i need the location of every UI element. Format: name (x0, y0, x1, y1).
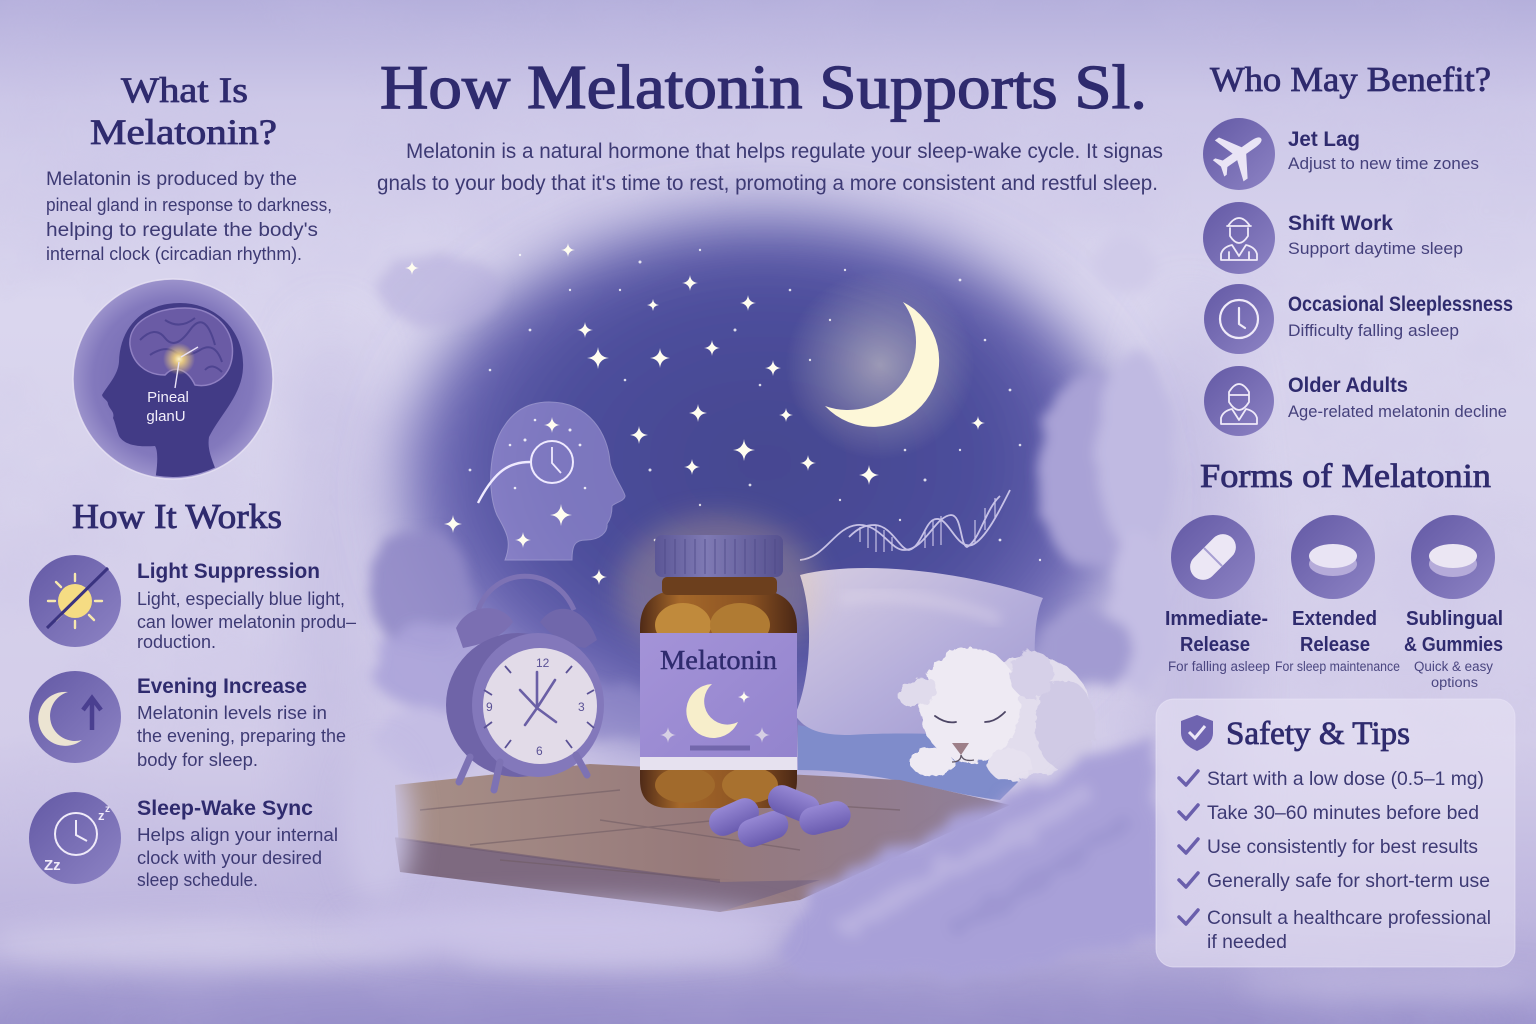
clock face (483, 648, 597, 764)
label: sublingual and gummies: & Gummies (1404, 634, 1503, 656)
pineal gland label: Pineal (147, 389, 189, 406)
text: sleep-wake sync: clock with your desired (137, 847, 322, 868)
text: shift work (1288, 211, 1463, 258)
lavender blanket (775, 735, 1170, 975)
icon: older adult (1204, 366, 1274, 436)
label: extended release: Extended (1292, 608, 1377, 630)
bottom mist (340, 904, 780, 956)
text: shift work: Support daytime sleep (1288, 239, 1463, 258)
text: evening increase: body for sleep. (137, 749, 258, 770)
panel background (1156, 699, 1515, 967)
heading: how it works: How It Works (72, 497, 282, 536)
text: evening increase (137, 674, 346, 770)
tip list: Generally safe for short-term use (1207, 870, 1490, 892)
text: sleep-wake sync: Sleep-Wake Sync (137, 796, 313, 820)
label: extended release: Release (1300, 634, 1370, 656)
text: light suppression: roduction. (137, 631, 216, 652)
clock ticks: 9 (486, 700, 493, 714)
text: jet lag (1288, 127, 1479, 173)
blue sheet (798, 719, 1030, 800)
item: jet lag (1203, 118, 1479, 190)
tip list: Use consistently for best results (1207, 836, 1478, 858)
item: occasional sleeplessness (1204, 284, 1513, 354)
text: older adults: Age-related melatonin decline (1288, 402, 1507, 421)
clock bells (456, 608, 513, 648)
icon: head with pineal gland (73, 279, 273, 480)
form: sublingual and gummies (1404, 515, 1503, 690)
item: sleep-wake sync (29, 792, 338, 890)
text: light suppression (137, 559, 357, 652)
pillow (795, 568, 1043, 735)
label: sublingual and gummies: Sublingual (1406, 608, 1503, 630)
panel: what is melatonin (46, 70, 332, 480)
small stars (469, 249, 1041, 561)
clock body (446, 633, 590, 777)
label: sublingual and gummies (1404, 608, 1503, 690)
text: jet lag: Adjust to new time zones (1288, 154, 1479, 173)
icon: shield (1181, 715, 1213, 751)
definition text: pineal gland in response to darkness, (46, 194, 332, 215)
item: light suppression (29, 555, 357, 652)
text: sleep-wake sync (137, 796, 338, 890)
label: immediate release: Release (1180, 634, 1250, 656)
melatonin bottle (618, 515, 818, 808)
pineal gland label: glanU (146, 408, 186, 425)
text: older adults: Older Adults (1288, 373, 1408, 397)
clock ticks: 12 (536, 656, 550, 670)
heading: who may benefit: Who May Benefit? (1210, 60, 1491, 99)
panel: who may benefit (1203, 60, 1513, 436)
text: sleep-wake sync: sleep schedule. (137, 869, 258, 890)
large stars (405, 243, 985, 585)
icon: clock and z's: z (105, 804, 110, 815)
text: evening increase: the evening, preparing the (137, 725, 346, 746)
DNA strand (800, 490, 1010, 560)
text: shift work: Shift Work (1288, 211, 1393, 235)
tip list: Start with a low dose (0.5–1 mg) (1207, 768, 1484, 790)
panel: how it works (29, 497, 357, 890)
subtitle: Melatonin is a natural hormone that helps regulate your sleep-wake cycle. It signas (406, 140, 1163, 163)
label crescent (686, 684, 738, 738)
alarm clock (446, 576, 604, 790)
item: older adults (1204, 366, 1507, 436)
item: evening increase (29, 671, 346, 770)
icon: clock (1204, 284, 1274, 354)
clock hands (520, 672, 556, 725)
text: occasional sleeplessness (1288, 292, 1513, 340)
pineal gland label (146, 389, 189, 425)
label: sublingual and gummies: Quick & easy (1414, 659, 1493, 674)
heading: safety and tips: Safety & Tips (1226, 716, 1410, 752)
tip list (1179, 768, 1491, 953)
icon: clock and z's (29, 792, 121, 884)
text: evening increase: Melatonin levels rise in (137, 702, 327, 723)
icon: lozenge (1411, 515, 1495, 599)
subtitle: gnals to your body that it's time to rest, promoting a more consistent and restful sleep. (377, 172, 1158, 195)
heading: what is melatonin (90, 70, 277, 152)
icon: worker (1203, 202, 1275, 274)
table left fade (346, 750, 410, 900)
right clouds (1037, 237, 1173, 690)
clock ticks: 3 (578, 700, 585, 714)
bottle cap (655, 535, 783, 577)
wooden table (395, 764, 1010, 912)
bottle neck (662, 577, 777, 595)
text: occasional sleeplessness: Difficulty falling asleep (1288, 321, 1459, 340)
text: jet lag: Jet Lag (1288, 127, 1360, 151)
bottle label (640, 633, 797, 770)
left clouds (370, 254, 660, 781)
text: evening increase: Evening Increase (137, 674, 307, 698)
definition text: Melatonin is produced by the (46, 169, 297, 190)
label: extended release: For sleep maintenance (1275, 659, 1400, 674)
purple capsules (705, 781, 854, 851)
title: How Melatonin Supports Sl. (380, 54, 1147, 122)
panel: safety and tips (1156, 699, 1515, 967)
clock ticks (484, 656, 594, 758)
head silhouette with clock (478, 402, 625, 560)
clock ticks: 6 (536, 744, 543, 758)
label name: Melatonin (660, 645, 778, 675)
icon: clock and z's: Zz (44, 857, 61, 874)
icon: crossed sun (29, 555, 121, 647)
label: immediate release: Immediate- (1165, 608, 1268, 630)
tip list: Consult a healthcare professional (1207, 907, 1491, 929)
bottle glass (640, 590, 797, 808)
panel: forms of melatonin (1165, 458, 1503, 690)
heading: what is melatonin: Melatonin? (90, 112, 277, 152)
heading: forms of melatonin: Forms of Melatonin (1200, 458, 1491, 495)
crescent moon (785, 270, 975, 460)
form: immediate release (1165, 515, 1270, 674)
definition text: helping to regulate the body's (46, 219, 318, 241)
icon: moon and arrow (29, 671, 121, 763)
text: older adults (1288, 373, 1507, 421)
sleeping lamb (894, 647, 1095, 781)
label: immediate release: For falling asleep (1168, 659, 1270, 674)
icon: airplane (1203, 118, 1275, 190)
label: extended release (1275, 608, 1400, 674)
heading: what is melatonin: What Is (121, 70, 248, 110)
form: extended release (1275, 515, 1400, 674)
icon: tablet (1291, 515, 1375, 599)
definition text: internal clock (circadian rhythm). (46, 243, 302, 264)
text: light suppression: Light Suppression (137, 559, 320, 583)
text: light suppression: Light, especially blue light, (137, 588, 345, 609)
clock feet (459, 755, 587, 790)
night sky glow (400, 215, 1130, 765)
text: sleep-wake sync: Helps align your internal (137, 824, 338, 845)
icon: capsule (1171, 515, 1255, 599)
icon: clock and z's: z (98, 808, 105, 823)
definition text (46, 169, 332, 264)
central night sky illustration (340, 215, 1173, 975)
label: immediate release (1165, 608, 1270, 674)
tip list: if needed (1207, 931, 1287, 953)
subtitle (377, 140, 1163, 195)
text: light suppression: can lower melatonin produ– (137, 611, 357, 632)
tip list: Take 30–60 minutes before bed (1207, 802, 1479, 824)
label: sublingual and gummies: options (1431, 675, 1478, 690)
item: shift work (1203, 202, 1463, 274)
clock handle (478, 576, 574, 610)
